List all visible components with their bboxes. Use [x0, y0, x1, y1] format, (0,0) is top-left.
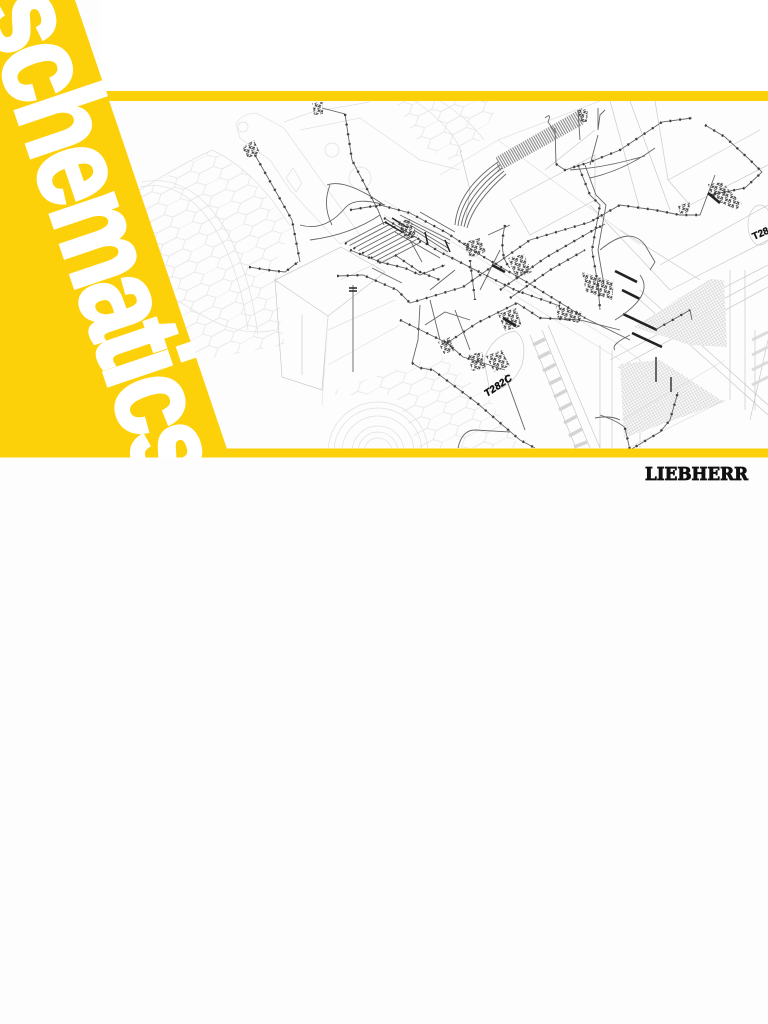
- main harness: [350, 205, 630, 340]
- probe: [352, 285, 354, 372]
- cooler fins: [496, 108, 584, 172]
- cover artwork: [0, 0, 768, 480]
- drawing background: [100, 100, 768, 450]
- right stairs: [752, 332, 768, 385]
- lower right wire: [595, 392, 678, 450]
- riser bundle: [455, 162, 506, 228]
- radiator grille lower: [620, 360, 724, 438]
- front tyre: [328, 358, 516, 448]
- hose bundle left: [345, 222, 421, 263]
- radiator grille upper: [634, 279, 727, 347]
- lower left harness: [337, 175, 715, 303]
- engine cylinder: [484, 331, 524, 392]
- upper tyre: [395, 101, 500, 160]
- lift arm: [236, 113, 360, 244]
- wiring harness: [242, 102, 762, 450]
- central lower harness: [400, 320, 505, 370]
- bottom yellow bar: [200, 448, 768, 458]
- machine line drawing: [140, 101, 768, 448]
- access stairs: [530, 325, 600, 448]
- battery box: [275, 247, 400, 405]
- upper harness: [555, 118, 692, 170]
- model label lower: T282C: [483, 373, 515, 399]
- left branches: [255, 155, 300, 262]
- hose bundle right: [395, 212, 455, 258]
- logo: Liebherr: LIEBHERR: [645, 465, 748, 485]
- chassis and railing: [384, 101, 640, 360]
- yellow slanted panel: [0, 0, 227, 458]
- top yellow bar: [100, 91, 768, 101]
- connector clusters: [242, 102, 742, 214]
- harness knots: [397, 219, 614, 372]
- left tyre: [135, 150, 292, 360]
